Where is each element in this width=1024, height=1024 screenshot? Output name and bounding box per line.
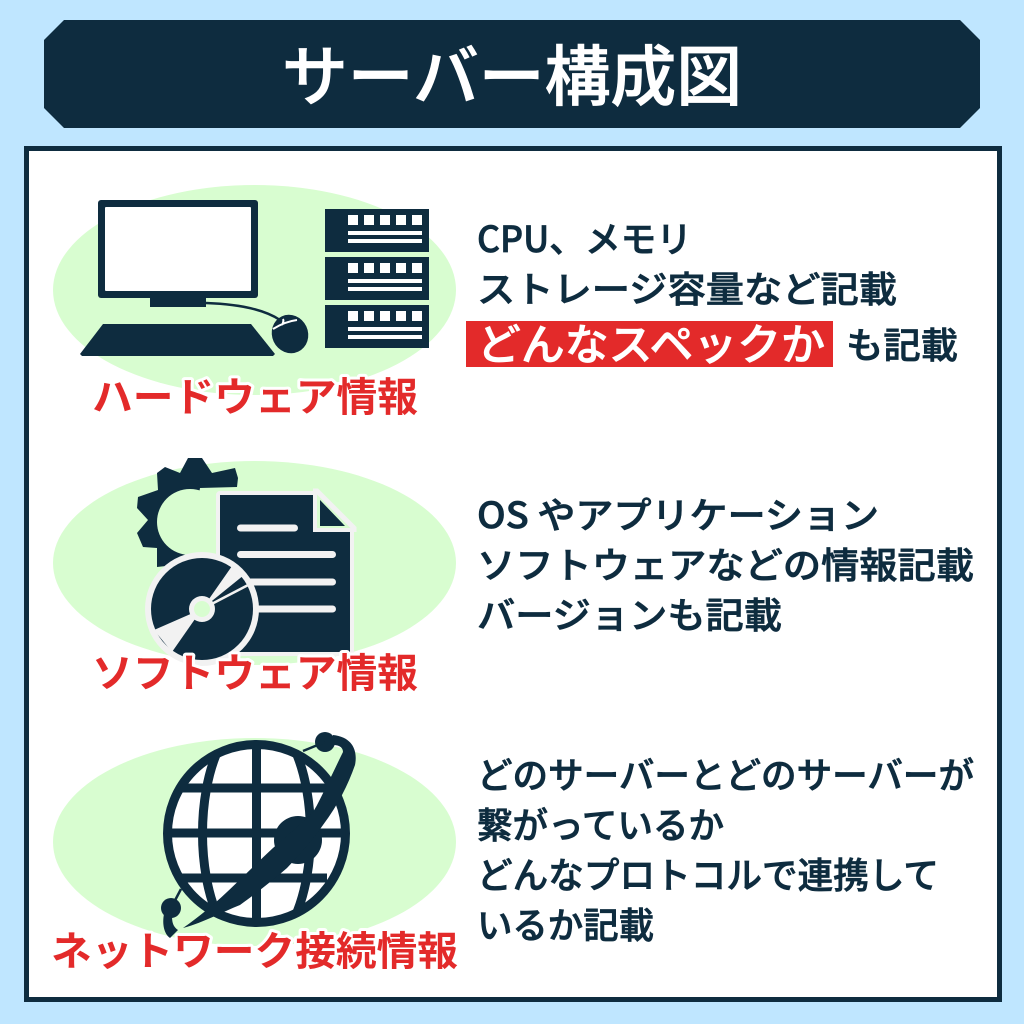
icon: server rack bbox=[325, 209, 429, 348]
label: software: ソフトウェア情報 bbox=[92, 641, 418, 699]
text block: software bbox=[477, 487, 974, 639]
text block: network: 繋がっているか bbox=[477, 797, 724, 849]
text block: network: どんなプロトコルで連携して bbox=[477, 847, 939, 899]
green ellipse background bbox=[53, 738, 456, 946]
text block: hardware bbox=[466, 211, 958, 373]
section: software bbox=[53, 458, 456, 699]
icon: gear bbox=[137, 458, 238, 567]
text block: hardware: も記載 bbox=[846, 317, 958, 369]
icon: document bbox=[220, 491, 354, 652]
main panel bbox=[26, 148, 1000, 1000]
label: hardware: ハードウェア情報 bbox=[92, 365, 418, 423]
green ellipse background bbox=[53, 185, 456, 395]
title banner bbox=[44, 20, 980, 128]
green ellipse background bbox=[53, 461, 456, 665]
icon: disc bbox=[145, 552, 259, 666]
highlight: red box: どんなスペックか bbox=[477, 311, 825, 373]
icon: desktop computer bbox=[80, 200, 315, 359]
text block: network: どのサーバーとどのサーバーが bbox=[477, 747, 974, 799]
text block: software: OS やアプリケーション bbox=[477, 487, 879, 539]
icon: globe with orbit bbox=[161, 732, 356, 938]
text block: hardware: ストレージ容量など記載 bbox=[477, 261, 897, 313]
text block: hardware: CPU、メモリ bbox=[477, 211, 692, 263]
text block: network bbox=[477, 747, 974, 949]
section: network bbox=[53, 732, 458, 970]
label: network: ネットワーク接続情報 bbox=[51, 919, 458, 977]
text block: software: バージョンも記載 bbox=[477, 587, 782, 639]
section: hardware bbox=[53, 185, 456, 423]
text block: network: いるか記載 bbox=[477, 897, 654, 949]
title banner: サーバー構成図 bbox=[282, 24, 742, 120]
text block: software: ソフトウェアなどの情報記載 bbox=[477, 537, 974, 589]
